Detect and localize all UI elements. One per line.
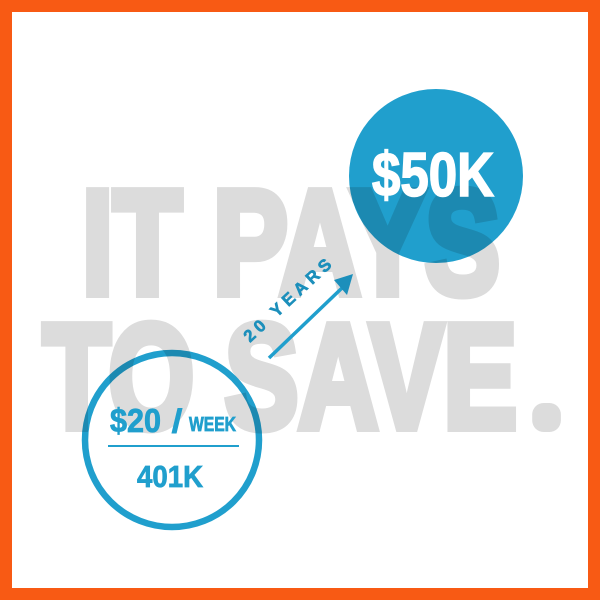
slash: / — [171, 403, 184, 441]
small outlined circle — [85, 353, 259, 527]
arrow: growth over time — [269, 274, 353, 358]
large blue circle — [349, 89, 523, 263]
background headline — [43, 160, 552, 460]
circle text: contribution — [110, 402, 236, 441]
arrow label: 20 YEARS — [240, 255, 335, 346]
headline period: . — [541, 385, 552, 429]
large circle value: $50K — [372, 141, 494, 210]
dollar amount: $20 — [110, 402, 161, 439]
divider line — [108, 445, 239, 447]
week label: WEEK — [189, 414, 236, 436]
401K label: 401K — [137, 459, 204, 494]
